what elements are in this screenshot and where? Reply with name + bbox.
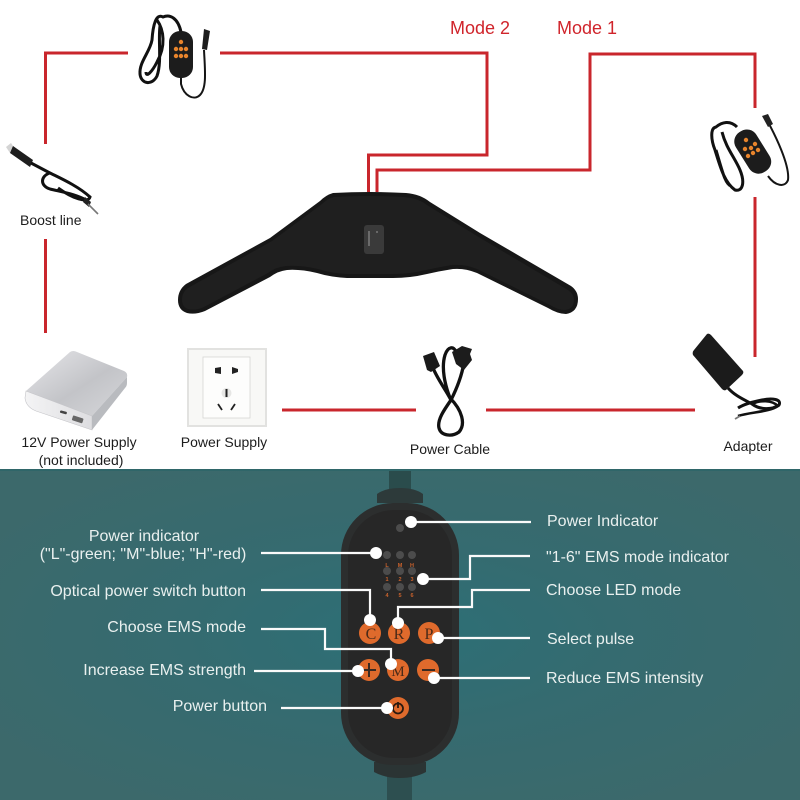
button M: M	[391, 664, 405, 680]
LED grid with L M H and 1-6 labels: 2	[398, 577, 402, 583]
red wiring: socket to cable	[282, 408, 416, 412]
button C: C	[366, 626, 376, 643]
controller body	[341, 471, 459, 800]
label: power indicator: Power indicator	[89, 528, 200, 545]
LED grid with L M H and 1-6 labels	[383, 551, 416, 599]
callout: power indicator left	[261, 547, 382, 559]
button R: R	[394, 626, 405, 643]
Adapter label: Adapter	[723, 438, 773, 454]
neck massager pad	[178, 192, 578, 314]
button P: P	[425, 626, 434, 643]
icon: 12V power bank	[25, 351, 127, 430]
red wiring: controller to adapter	[754, 197, 756, 357]
LED grid with L M H and 1-6 labels: 5	[398, 593, 402, 599]
label: power indicator right: Power Indicator	[547, 513, 659, 530]
power LED	[396, 524, 404, 532]
callout: increase strength	[254, 665, 364, 677]
callout: select pulse	[432, 632, 530, 644]
label: optical power switch button: Optical power switch button	[50, 583, 246, 600]
label: power button: Power button	[173, 698, 267, 715]
button P	[418, 622, 440, 644]
Power Supply label: Power Supply	[181, 434, 267, 450]
button plus	[358, 659, 380, 681]
callout: LED mode	[392, 590, 530, 629]
red wiring: cable to adapter	[486, 408, 695, 412]
Mode 1 label: Mode 1	[557, 18, 617, 38]
red wiring: Mode 1 route	[377, 54, 755, 192]
icon: left controller with cable	[140, 16, 210, 98]
label: choose EMS mode: Choose EMS mode	[107, 619, 246, 636]
Mode 2 label: Mode 2	[450, 18, 510, 38]
red wiring: controller to boost line	[46, 53, 128, 144]
button M	[387, 659, 409, 681]
callout: power indicator	[405, 516, 531, 528]
label: select pulse: Select pulse	[547, 631, 634, 648]
label: EMS mode indicator: "1-6" EMS mode indicator	[546, 549, 730, 566]
label: indicator colours: ("L"-green; "M"-blue; "H"-red)	[40, 546, 246, 563]
callout: choose EMS mode	[261, 629, 397, 670]
label: reduce EMS intensity: Reduce EMS intensity	[546, 670, 703, 687]
label: choose LED mode: Choose LED mode	[546, 582, 681, 599]
white background	[0, 0, 800, 470]
icon: power adapter	[693, 334, 780, 419]
button R	[388, 622, 410, 644]
LED grid with L M H and 1-6 labels: 3	[410, 577, 414, 583]
panel: control box guide	[0, 469, 800, 800]
LED grid with L M H and 1-6 labels: H	[410, 563, 414, 569]
icon: right controller with cable	[712, 114, 788, 190]
icon: USB boost line	[6, 143, 98, 214]
callout: reduce intensity	[428, 672, 530, 684]
icon: power cable	[423, 346, 472, 435]
button C	[359, 622, 381, 644]
LED grid with L M H and 1-6 labels: L	[385, 563, 389, 569]
callout: EMS mode indicator	[417, 556, 530, 585]
LED grid with L M H and 1-6 labels: 6	[410, 593, 414, 599]
LED grid with L M H and 1-6 labels: 4	[385, 593, 389, 599]
red wiring: Mode 2 route	[220, 53, 487, 192]
label: increase EMS strength: Increase EMS strength	[83, 662, 246, 679]
LED grid with L M H and 1-6 labels: 1	[385, 577, 389, 583]
button minus	[417, 659, 439, 681]
Power Cable label: Power Cable	[410, 441, 490, 457]
icon: wall socket	[187, 348, 267, 427]
Boost line label: Boost line	[20, 212, 82, 228]
12V power supply label: 12V Power Supply	[21, 434, 137, 450]
callout: optical power switch	[261, 590, 376, 626]
LED grid with L M H and 1-6 labels: M	[398, 563, 403, 569]
power button	[387, 697, 409, 719]
callout: power button	[281, 702, 393, 714]
red wiring: boost line to 12V supply	[44, 239, 47, 333]
not included label: (not included)	[39, 452, 123, 468]
